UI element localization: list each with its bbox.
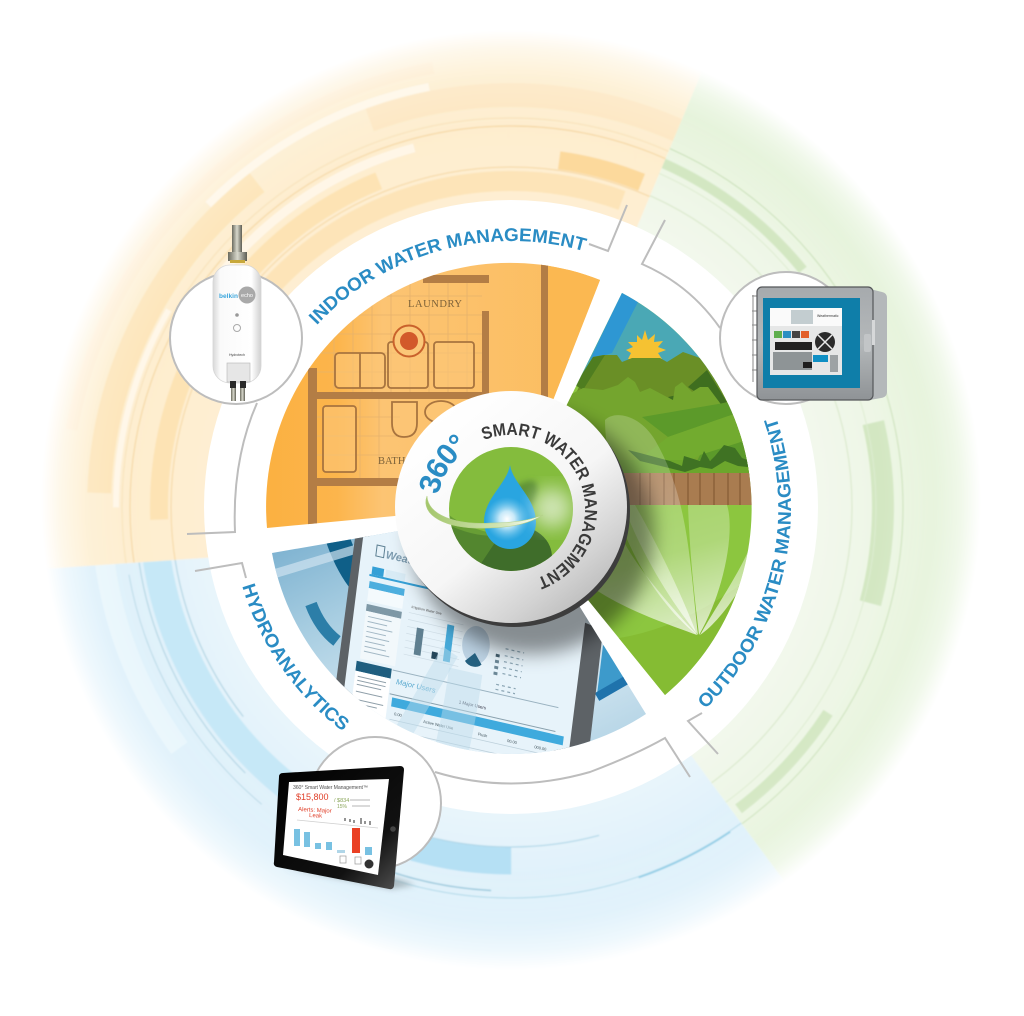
controller housing — [757, 287, 887, 400]
tablet screen — [283, 779, 389, 875]
white ring — [204, 200, 818, 814]
major users table: Flush — [478, 731, 488, 738]
heading: outdoor water management: OUTDOOR WATER MANAGEMENT — [699, 420, 791, 706]
dark tree line — [668, 370, 727, 404]
outer wash: hydroanalytics blue sector — [56, 558, 778, 960]
major users heading: Major Users — [396, 677, 436, 695]
outer wash: outdoor green sector — [637, 79, 973, 874]
pale highlight — [532, 488, 572, 528]
wedge: indoor floor plan — [260, 260, 610, 540]
badge title: 360° — [420, 434, 458, 493]
orbit swoosh — [426, 496, 543, 528]
shrubs — [628, 445, 756, 472]
translucent arcs over dashboard — [392, 641, 468, 769]
badge shadow — [410, 410, 654, 654]
dashboard sidebar — [350, 580, 405, 721]
sun — [626, 330, 666, 359]
tablet body — [274, 766, 404, 889]
dashboard legend table — [492, 647, 524, 695]
connector lines — [187, 205, 720, 784]
sensor status icons: Hydrotech — [229, 353, 245, 357]
centre badge: SMART WATER MANAGEMENT — [482, 422, 598, 590]
heading: indoor water management: INDOOR WATER MANAGEMENT — [308, 228, 588, 324]
tablet report figures: 15% — [337, 804, 348, 810]
floor plan grid — [315, 283, 482, 478]
tablet report title: 360° Smart Water Management™ — [293, 785, 368, 791]
sensor body — [213, 265, 261, 383]
leak alert target — [394, 326, 424, 356]
sensor logo: belkin — [219, 293, 238, 300]
dashboard bar chart: Irrigation Water Use — [411, 605, 442, 616]
device circle: irrigation controller — [720, 272, 887, 404]
major users table: Major Users — [382, 729, 409, 741]
major users table — [390, 697, 564, 754]
lower lawn — [618, 586, 740, 695]
controller blue screen — [763, 298, 860, 388]
major users heading — [390, 670, 558, 731]
dashboard bar chart — [404, 604, 464, 667]
wedge: outdoor landscape — [566, 293, 752, 695]
floor plan fixtures — [323, 342, 474, 472]
water drop — [484, 465, 536, 549]
heading: hydroanalytics: HYDROANALYTICS — [242, 583, 348, 730]
hill bands — [642, 402, 737, 437]
major users heading: 1 Major Users — [459, 699, 487, 711]
sky — [576, 293, 718, 385]
sensor logo: echo — [241, 293, 253, 299]
tablet report figures: Alerts: Major — [298, 807, 332, 815]
dashboard gauge — [462, 626, 490, 667]
device circle: water sensor — [170, 225, 302, 404]
tablet report figures — [296, 792, 378, 828]
tablet shadow — [285, 868, 415, 889]
dashboard tabs — [369, 566, 428, 590]
sensor outlet pipes — [227, 363, 250, 401]
sensor logo — [219, 286, 256, 304]
sprinkler sprays — [596, 415, 755, 635]
tablet report figures: $15,800 — [296, 792, 329, 802]
controller panel — [770, 308, 842, 375]
controller panel: Weathermatic — [817, 314, 839, 318]
centre badge — [395, 391, 630, 627]
room labels: BATH — [378, 456, 406, 467]
device circle: tablet report — [274, 737, 441, 889]
major users table: 000.00 — [534, 744, 547, 752]
major users table: 0.00 — [394, 711, 403, 718]
sensor status icons — [229, 313, 245, 357]
controller hinges — [752, 295, 757, 382]
major users table: Active Water Use — [423, 719, 454, 731]
tablet bezel — [335, 530, 603, 760]
room labels: LAUNDRY — [408, 299, 462, 310]
green disk with water drop — [449, 447, 573, 580]
tablet report figures: Leak — [309, 813, 323, 820]
wedge: hydroanalytics dashboard — [272, 531, 646, 754]
dashboard logo: Weathermatic — [385, 549, 457, 577]
room labels — [378, 299, 462, 467]
dark hill — [577, 352, 748, 468]
dashboard logo — [375, 544, 410, 564]
fence — [624, 473, 752, 505]
sensor pipe fitting — [228, 225, 247, 263]
dashboard screen — [344, 531, 586, 754]
tablet home button — [390, 826, 396, 832]
background arcs — [276, 539, 354, 646]
tablet report figures: / $834 — [334, 798, 349, 804]
tablet bar chart — [294, 828, 374, 868]
lime hill — [566, 377, 750, 480]
floor plan walls — [308, 262, 548, 533]
major users table: 00.00 — [507, 738, 518, 745]
